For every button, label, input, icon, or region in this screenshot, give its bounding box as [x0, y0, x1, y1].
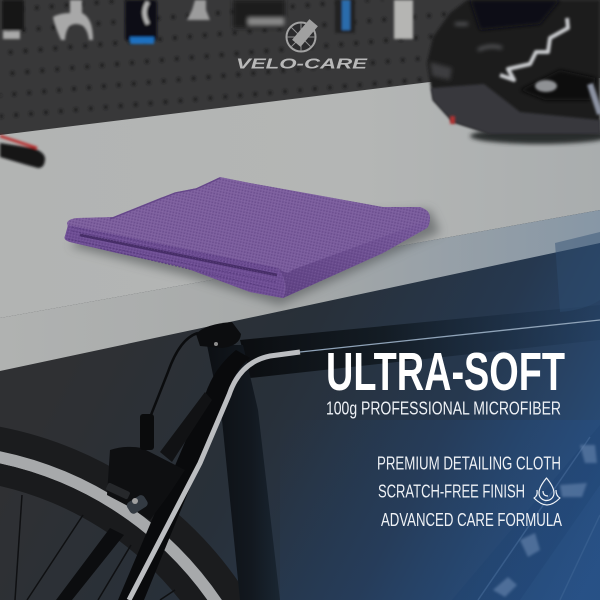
inner rim [0, 464, 207, 600]
helmet highlight [500, 18, 568, 80]
icon: small spanner [187, 0, 210, 20]
towel hem [110, 178, 220, 219]
pegboard with tools [0, 0, 600, 145]
icon: water drop on cloth [534, 478, 560, 505]
top tube [240, 305, 600, 378]
logo [236, 19, 368, 72]
seat collar [196, 322, 241, 348]
icon: wrench [53, 0, 93, 40]
feature: scratch-free finish: SCRATCH-FREE FINISH [378, 481, 525, 502]
microfiber towel [65, 177, 440, 305]
feature list [377, 452, 563, 530]
icon: white bar tool [394, 0, 413, 39]
spokes [15, 495, 175, 600]
tyre [0, 427, 250, 600]
frame highlight stripe [129, 352, 300, 600]
towel front folds [65, 225, 285, 298]
towel right fold [278, 220, 429, 298]
rear stay [160, 392, 212, 462]
helmet reflections [450, 80, 600, 124]
screwdriver [0, 136, 45, 168]
helmet [427, 0, 600, 144]
seat tube [207, 345, 280, 600]
downtube graphics [452, 425, 600, 600]
background bottle shape [555, 232, 600, 312]
towel woven texture [65, 177, 430, 298]
icon: blue hex key [335, 0, 355, 33]
blue tint overlay [280, 420, 600, 600]
chain stay [56, 528, 124, 600]
counter top surface [0, 78, 600, 318]
wall below counter [0, 240, 600, 600]
silver rim [0, 451, 222, 600]
bicycle frame [56, 305, 600, 600]
bicycle wheel [0, 427, 250, 600]
icon: wheel and cloth [286, 19, 318, 51]
icon: dark pliers [233, 0, 285, 28]
seat stay [118, 350, 250, 600]
counter front face [0, 210, 600, 371]
helmet vents [430, 0, 596, 100]
brake cable [149, 333, 198, 420]
icon: black tool handle [2, 0, 24, 39]
logo wordmark: VELO-CARE [236, 56, 368, 72]
icon: blue handled tool [125, 0, 157, 44]
brake caliper [105, 414, 185, 520]
